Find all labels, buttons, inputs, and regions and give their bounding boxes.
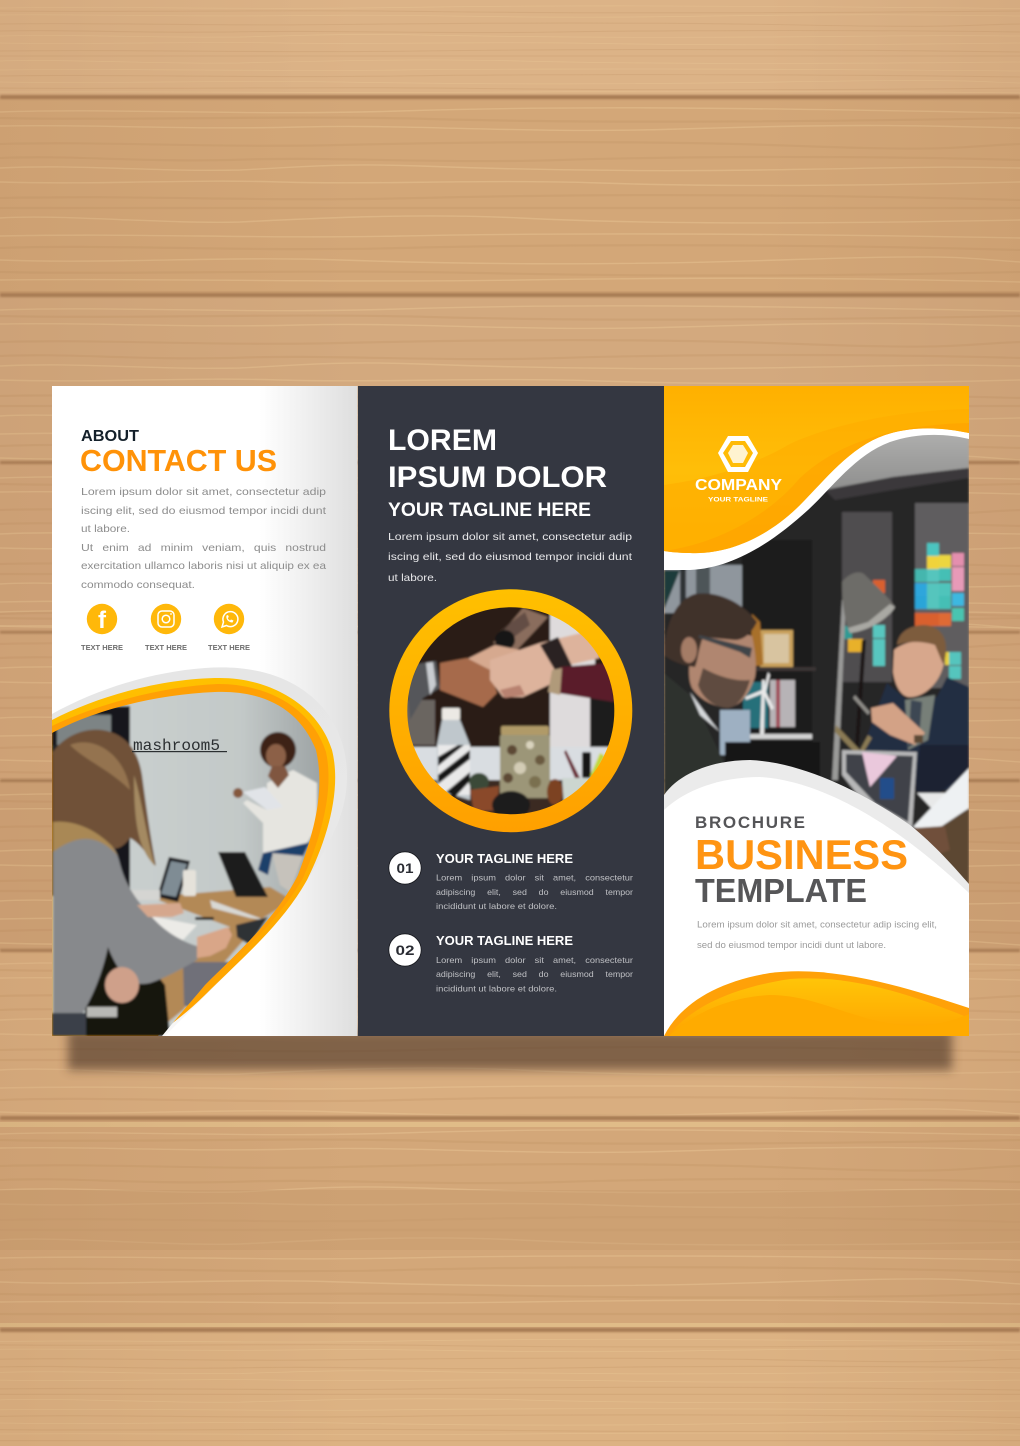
photo: office discussion [664,434,969,884]
subheading: your tagline here: YOUR TAGLINE HERE [388,500,591,521]
text block: about paragraph [81,486,326,591]
heading: lorem ipsum dolor [388,424,607,494]
label: facebook text: TEXT HERE [81,643,123,652]
text block: about paragraph: Lorem ipsum dolor sit amet, consectetur adip [81,486,326,498]
white wave under yellow header [664,386,969,570]
text block: about paragraph: iscing elit, sed do eiusmod tempor incidi dunt [81,505,326,517]
photo: meeting with presenter [52,690,322,1036]
text block: cover description: sed do eiusmod tempor incidi dunt ut labore. [697,940,886,950]
icon: facebook: f [98,607,107,634]
text block: intro paragraph: iscing elit, sed do eiusmod tempor incidi dunt [388,551,632,563]
text block: about paragraph: Ut enim ad minim veniam, quis nostrud [81,542,326,554]
yellow wave footer [664,971,969,1036]
heading: contact us: CONTACT US [80,443,277,478]
icon: whatsapp [214,604,244,634]
text block: about paragraph: ut labore. [81,523,130,535]
text block: intro paragraph: Lorem ipsum dolor sit amet, consectetur adip [388,531,632,543]
header: darker wave layer [664,409,969,553]
numbered item 02: adipiscing elit, sed do eiusmod tempor [436,969,633,979]
numbered item 01: adipiscing elit, sed do eiusmod tempor [436,887,633,897]
heading: about: ABOUT [81,428,140,445]
numbered item 02: incididunt ut labore et dolore. [436,984,557,994]
curved frame: grey band [52,667,347,1036]
panel: lorem ipsum dolor [358,386,664,1036]
label: whatsapp text: TEXT HERE [208,643,250,652]
curved frame: orange band [52,678,335,1036]
curved frame: deep orange band [52,684,329,1036]
logo text: your tagline: YOUR TAGLINE [708,496,769,504]
icon: facebook [87,604,117,634]
panel: about / contact us [52,386,358,1036]
text block: intro paragraph: ut labore. [388,572,437,584]
text block: about paragraph: commodo consequat. [81,579,195,591]
numbered item 01: incididunt ut labore et dolore. [436,901,557,911]
lower panel: grey curve [664,760,969,1036]
heading: brochure: BROCHURE [695,813,805,832]
heading: template: TEMPLATE [695,872,867,909]
logo: hexagon [718,436,758,472]
logo text: company: COMPANY [695,477,782,494]
text block: cover description: Lorem ipsum dolor sit amet, consectetur adip iscing elit, [697,920,937,930]
heading: business: BUSINESS [695,831,908,878]
header: deeper wave layer [664,423,969,553]
text block: about paragraph: exercitation ullamco laboris nisi ut aliquip ex ea [81,560,326,572]
numbered item 01: Lorem ipsum dolor sit amet, consectetur [436,872,633,882]
label: instagram text: TEXT HERE [145,643,187,652]
heading: lorem ipsum dolor: LOREM [388,424,497,457]
icon: instagram [151,604,181,634]
numbered item 01: 01 [396,860,414,876]
lower panel: white curve [664,777,969,1036]
numbered item 02: Lorem ipsum dolor sit amet, consectetur [436,955,633,965]
brochure drop shadow [68,1030,952,1070]
numbered item 01 [389,851,633,911]
circular photo frame [389,589,632,832]
heading: lorem ipsum dolor: IPSUM DOLOR [388,461,607,494]
numbered item 02 [389,933,633,994]
numbered item 02: YOUR TAGLINE HERE [436,933,573,948]
yellow wave header [664,386,969,553]
photo: team fist bump [405,605,618,820]
panel: brochure cover [664,386,969,1036]
wall lettering: mashroom5 [133,737,220,755]
numbered item 02: 02 [396,942,415,958]
numbered item 01: YOUR TAGLINE HERE [436,851,573,866]
text block: intro paragraph [388,531,632,584]
text block: cover description [697,920,937,950]
